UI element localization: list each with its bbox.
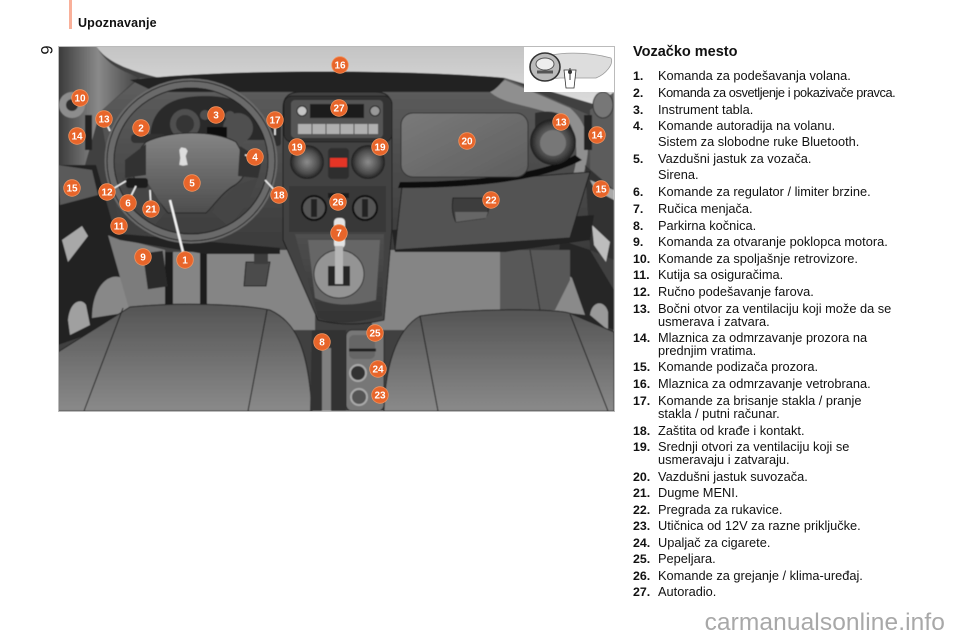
item 17: stakla / putni računar. xyxy=(658,406,780,421)
callout numbers: 1 xyxy=(182,256,188,266)
item 25 xyxy=(633,551,716,566)
item 13: 13. xyxy=(633,302,650,316)
legend list: Komanda za osvetljenje i pokazivače pravca. xyxy=(658,85,895,100)
item 27 xyxy=(633,584,716,599)
item 3 xyxy=(633,102,753,117)
item 18 xyxy=(633,423,805,438)
callout numbers: 6 xyxy=(125,198,131,210)
callout numbers: 21 xyxy=(145,204,157,216)
dark top band xyxy=(130,72,505,92)
item 5 xyxy=(633,151,811,182)
legend list: Parkirna kočnica. xyxy=(658,218,756,233)
legend list: Komande za regulator / limiter brzine. xyxy=(658,184,871,199)
callout numbers: 5 xyxy=(189,178,195,190)
callout numbers: 9 xyxy=(140,252,146,264)
item 17: 17. xyxy=(633,394,650,408)
callout numbers: 20 xyxy=(461,136,473,148)
legend list: 20. xyxy=(633,470,650,484)
base xyxy=(58,46,614,411)
legend list: 22. xyxy=(633,503,650,517)
legend list: Vazdušni jastuk suvozača. xyxy=(658,469,808,484)
callout numbers: 15 xyxy=(66,184,78,194)
leader lines xyxy=(170,200,185,260)
item 8 xyxy=(633,218,756,233)
item 11 xyxy=(633,267,783,282)
item 10 xyxy=(633,251,858,266)
item 24 xyxy=(633,535,770,550)
callout numbers: 13 xyxy=(98,114,110,126)
legend list: 27. xyxy=(633,585,650,599)
callout numbers: 4 xyxy=(252,152,258,164)
dashboard illustration xyxy=(58,46,615,412)
callout numbers: 12 xyxy=(101,188,113,198)
callout numbers: 2 xyxy=(138,124,144,134)
item 21 xyxy=(633,485,738,500)
item 9 xyxy=(633,234,888,249)
item 22 xyxy=(633,502,782,517)
legend list: Komande za grejanje / klima-uređaj. xyxy=(658,568,863,583)
center stack xyxy=(283,92,392,324)
legend list: 3. xyxy=(633,103,643,117)
legend list: Instrument tabla. xyxy=(658,102,753,117)
legend list: 18. xyxy=(633,424,650,438)
item 23 xyxy=(633,518,861,533)
callout numbers: 19 xyxy=(374,142,386,154)
callout numbers: 14 xyxy=(71,132,83,142)
legend list: Ručno podešavanje farova. xyxy=(658,284,814,299)
legend list: Komanda za podešavanja volana. xyxy=(658,68,851,83)
item 14: Mlaznica za odmrzavanje prozora na xyxy=(658,330,867,345)
floor carpets xyxy=(205,250,315,330)
left pillar and door xyxy=(64,47,136,166)
callout numbers: 17 xyxy=(269,116,281,126)
callout numbers: 13 xyxy=(555,118,567,128)
item 4: 4. xyxy=(633,119,643,133)
item 26 xyxy=(633,568,863,583)
item 19 xyxy=(633,439,849,467)
legend list: Dugme MENI. xyxy=(658,485,738,500)
item 17: Komande za brisanje stakla / pranje xyxy=(658,393,861,408)
callout numbers xyxy=(64,57,609,403)
radio xyxy=(284,96,392,142)
item 6 xyxy=(633,184,871,199)
callout numbers: 19 xyxy=(291,142,303,154)
callout numbers: 8 xyxy=(319,338,325,348)
page number: 6 xyxy=(37,45,55,55)
item 13: Bočni otvor za ventilaciju koji može da se xyxy=(658,301,891,316)
legend list: Pregrada za rukavice. xyxy=(658,502,782,517)
legend list: 26. xyxy=(633,569,650,583)
item 19: usmeravaju i zatvaraju. xyxy=(658,452,790,467)
legend list: 6. xyxy=(633,185,643,199)
legend list: 15. xyxy=(633,360,650,374)
windshield xyxy=(96,47,614,104)
pedal xyxy=(244,262,270,286)
callout numbers: 10 xyxy=(74,94,86,104)
legend list: Kutija sa osiguračima. xyxy=(658,267,783,282)
callout numbers: 14 xyxy=(591,130,603,142)
item 17 xyxy=(633,393,861,421)
item 5: Vazdušni jastuk za vozača. xyxy=(658,151,811,166)
dash main xyxy=(102,78,590,191)
item 15 xyxy=(633,359,818,374)
dash light arc xyxy=(490,80,588,178)
legend heading: Vozačko mesto xyxy=(633,44,738,60)
cluster xyxy=(150,96,268,140)
callout numbers: 16 xyxy=(334,60,346,72)
passenger airbag panel xyxy=(401,113,528,177)
legend list: 21. xyxy=(633,486,650,500)
legend list: 1. xyxy=(633,69,643,83)
seats xyxy=(58,304,312,411)
watermark: carmanualsonline.info xyxy=(705,609,945,636)
header accent line xyxy=(69,0,72,29)
glove box area xyxy=(395,172,590,250)
item 7 xyxy=(633,201,753,216)
callout numbers: 23 xyxy=(374,390,386,402)
legend list: Upaljač za cigarete. xyxy=(658,535,770,550)
climate xyxy=(289,186,386,232)
item 4: Komande autoradija na volanu. xyxy=(658,118,835,133)
legend list: Komande za spoljašnje retrovizore. xyxy=(658,251,858,266)
legend list: 7. xyxy=(633,202,643,216)
item 13: usmerava i zatvara. xyxy=(658,314,770,329)
vents and hazard xyxy=(290,145,324,179)
legend list: 16. xyxy=(633,377,650,391)
item 4: Sistem za slobodne ruke Bluetooth. xyxy=(658,134,859,149)
under dash sides xyxy=(108,235,165,312)
item 4 xyxy=(633,118,859,149)
inset locator xyxy=(524,46,614,92)
item 5: Sirena. xyxy=(658,167,699,182)
legend list: 25. xyxy=(633,552,650,566)
callout numbers: 22 xyxy=(485,196,497,206)
legend list: Utičnica od 12V za razne priključke. xyxy=(658,518,861,533)
callout numbers: 26 xyxy=(332,198,344,208)
item 19: Srednji otvori za ventilaciju koji se xyxy=(658,439,849,454)
legend list: 8. xyxy=(633,219,643,233)
item 20 xyxy=(633,469,808,484)
item 12 xyxy=(633,284,814,299)
item 19: 19. xyxy=(633,440,650,454)
lower dash band xyxy=(100,232,280,254)
callout numbers: 15 xyxy=(595,184,607,196)
callout numbers: 3 xyxy=(213,110,219,122)
section heading: Upoznavanje xyxy=(78,16,157,30)
item 13 xyxy=(633,301,891,329)
legend list: 24. xyxy=(633,536,650,550)
legend list: 9. xyxy=(633,235,643,249)
right pillar xyxy=(590,92,614,190)
console and shifter xyxy=(295,234,384,323)
legend list: 12. xyxy=(633,285,650,299)
callout numbers: 24 xyxy=(372,364,384,376)
callout numbers: 11 xyxy=(114,222,125,232)
legend list: 11. xyxy=(633,268,650,282)
tunnel xyxy=(310,330,346,411)
callout numbers: 7 xyxy=(336,228,342,240)
legend list: 2. xyxy=(633,86,643,100)
legend list: Zaštita od krađe i kontakt. xyxy=(658,423,805,438)
legend list: Ručica menjača. xyxy=(658,201,753,216)
item 5: 5. xyxy=(633,152,643,166)
item 14 xyxy=(633,330,868,358)
legend list: 23. xyxy=(633,519,650,533)
callout numbers: 18 xyxy=(273,190,285,202)
legend list: Autoradio. xyxy=(658,584,716,599)
callout numbers: 27 xyxy=(333,104,345,114)
legend list: Komande podizača prozora. xyxy=(658,359,818,374)
item 14: 14. xyxy=(633,331,650,345)
legend list: Mlaznica za odmrzavanje vetrobrana. xyxy=(658,376,871,391)
legend list: 10. xyxy=(633,252,650,266)
item 14: prednjim vratima. xyxy=(658,343,756,358)
item 2 xyxy=(633,85,895,100)
item 1 xyxy=(633,68,851,83)
legend list: Komanda za otvaranje poklopca motora. xyxy=(658,234,888,249)
callout numbers: 25 xyxy=(369,328,381,340)
steering wheel xyxy=(134,133,245,213)
right side vent xyxy=(534,111,573,130)
item 16 xyxy=(633,376,871,391)
legend list: Pepeljara. xyxy=(658,551,716,566)
